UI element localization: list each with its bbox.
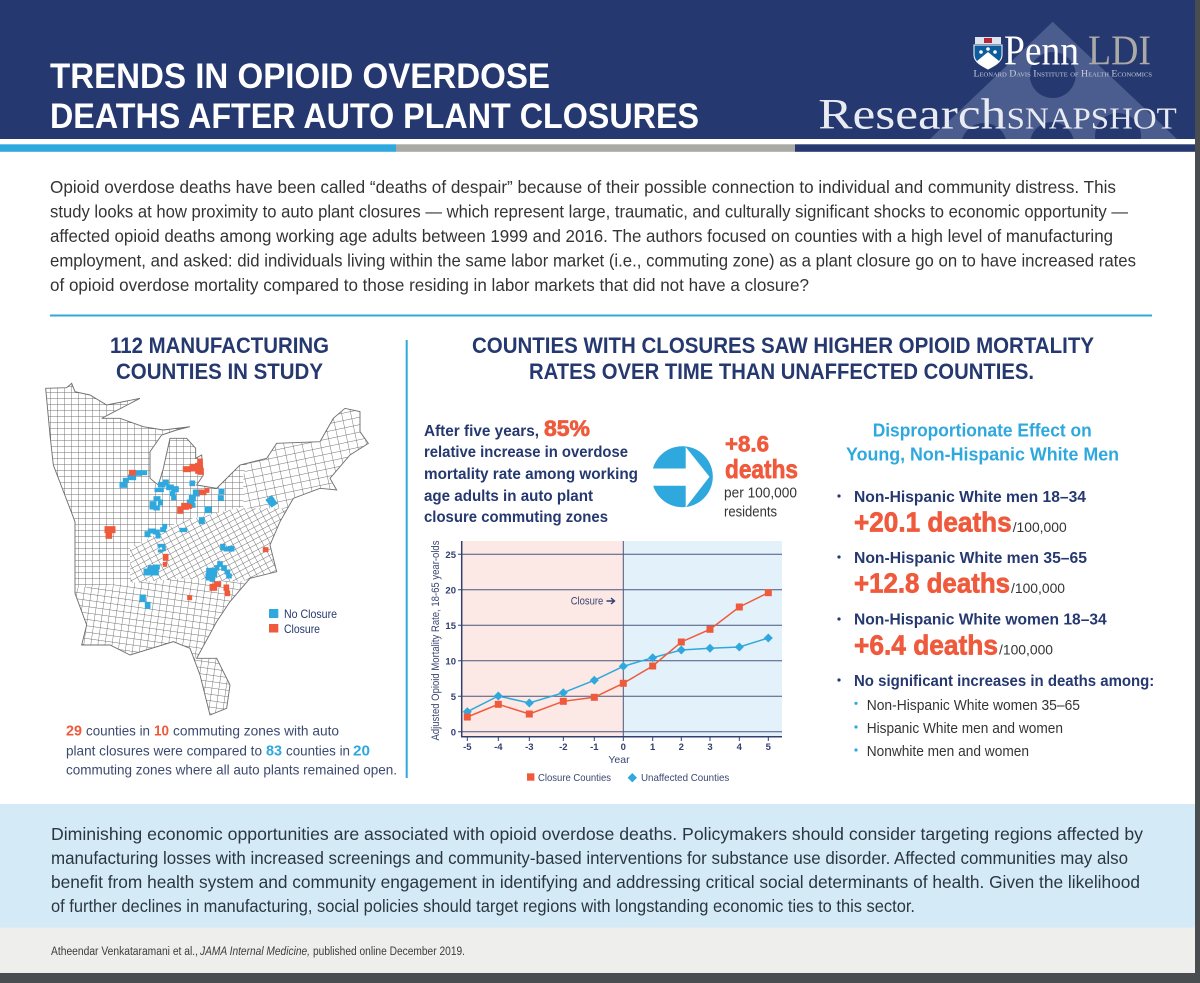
series: closure counties bbox=[464, 589, 772, 720]
title: TRENDS IN OPIOID OVERDOSE bbox=[50, 57, 550, 96]
stat: white men 35-65: Non-Hispanic White men 35–65 bbox=[854, 550, 1087, 567]
intro paragraph: study looks at how proximity to auto plant closures — which represent large, traumatic, and culturally significant shocks to economic opportunity — bbox=[50, 202, 1128, 222]
x axis labels: 5 bbox=[766, 742, 772, 753]
stat: plus 8.6 deaths: per 100,000 bbox=[724, 486, 797, 502]
no significant increases list: Hispanic White men and women bbox=[867, 721, 1063, 737]
stat: white men 18-34 bbox=[837, 489, 1086, 538]
x axis labels: -1 bbox=[590, 742, 599, 753]
line chart bbox=[430, 540, 782, 784]
map caption: counties in bbox=[86, 723, 150, 739]
y axis labels: 0 bbox=[451, 727, 456, 738]
panel: policy conclusion: of further declines in manufacturing, social policies should target regions with longstanding economic ties to this sector. bbox=[51, 896, 915, 916]
x axis labels: -4 bbox=[494, 742, 503, 753]
map legend: No Closure bbox=[284, 607, 337, 621]
x axis title: Year bbox=[608, 754, 630, 766]
heading: counties with closures: RATES OVER TIME THAN UNAFFECTED COUNTIES. bbox=[529, 359, 1034, 384]
heading: disproportionate effect bbox=[846, 420, 1119, 465]
Research Snapshot wordmark: SNAPSHOT bbox=[1007, 100, 1177, 135]
logo: Penn LDI bbox=[974, 28, 1152, 79]
panel: policy conclusion: manufacturing losses with increased screenings and community-based interventions for substance use disorder. Affected communities may also bbox=[51, 848, 1128, 868]
panel: policy conclusion bbox=[0, 804, 1195, 928]
x axis labels: 3 bbox=[707, 742, 713, 753]
watermark emblem bbox=[930, 22, 1177, 139]
logo: Penn LDI: Leonard Davis Institute of Health Economics bbox=[974, 69, 1152, 79]
map caption: 10 bbox=[154, 724, 169, 740]
heading: disproportionate effect: Young, Non-Hispanic White Men bbox=[846, 444, 1119, 465]
x axis labels: -5 bbox=[463, 742, 472, 753]
heading: counties with closures bbox=[472, 333, 1094, 384]
stat: white men 35-65: +12.8 deaths bbox=[854, 568, 1010, 599]
callout: 85 percent increase: mortality rate among working bbox=[424, 466, 638, 483]
icon: arrow in circle bbox=[650, 446, 713, 508]
stat: plus 8.6 deaths: deaths bbox=[725, 454, 798, 484]
logo: Penn LDI: Penn bbox=[1004, 28, 1079, 74]
x axis labels: 0 bbox=[621, 742, 626, 753]
no significant increases list: No significant increases in deaths among: bbox=[854, 673, 1154, 690]
map caption: 83 bbox=[266, 744, 282, 760]
intro paragraph bbox=[50, 177, 1136, 295]
intro paragraph: affected opioid deaths among working age adults between 1999 and 2016. The authors focused on counties with a high level of manufacturing bbox=[50, 226, 1113, 246]
x axis labels: 2 bbox=[679, 742, 684, 753]
y axis labels: 10 bbox=[445, 656, 456, 667]
map legend bbox=[269, 607, 337, 636]
map caption: counties in bbox=[286, 743, 350, 759]
map legend: Closure bbox=[284, 622, 320, 636]
stat: white men 18-34: +20.1 deaths bbox=[854, 507, 1012, 538]
stat: white women 18-34: +6.4 deaths bbox=[854, 629, 998, 660]
stat: plus 8.6 deaths bbox=[724, 432, 798, 521]
stat: white women 18-34: Non-Hispanic White women 18–34 bbox=[854, 612, 1107, 629]
heading: counties with closures: COUNTIES WITH CLOSURES SAW HIGHER OPIOID MORTALITY bbox=[472, 333, 1094, 358]
panel: policy conclusion: benefit from health system and community engagement in identifying and addressing critical social determinants of health. Given the likelihood bbox=[51, 872, 1140, 892]
stat: white men 18-34: Non-Hispanic White men 18–34 bbox=[854, 489, 1086, 506]
callout: 85 percent increase: age adults in auto plant bbox=[424, 488, 594, 505]
map caption: 20 bbox=[353, 744, 370, 760]
x axis labels: 1 bbox=[650, 742, 656, 753]
footer citation: published online December 2019. bbox=[313, 946, 465, 958]
stat: white women 18-34 bbox=[837, 612, 1107, 660]
map caption: commuting zones with auto bbox=[173, 723, 339, 739]
title bbox=[50, 57, 699, 136]
icon: Penn shield bbox=[974, 37, 1002, 69]
chart legend: Closure Counties bbox=[538, 772, 611, 784]
chart legend bbox=[527, 772, 729, 784]
header band bbox=[0, 0, 1195, 139]
heading: 112 manufacturing counties: 112 MANUFACTURING bbox=[110, 333, 329, 358]
map caption: commuting zones where all auto plants remained open. bbox=[66, 761, 397, 777]
intro paragraph: Opioid overdose deaths have been called “deaths of despair” because of their possible connection to individual and community distress. This bbox=[50, 177, 1116, 197]
stat list bbox=[837, 489, 1154, 760]
y axis labels: 5 bbox=[451, 692, 457, 703]
intro paragraph: employment, and asked: did individuals living within the same labor market (i.e., commuting zone) as a plant closure go on to have increased rates bbox=[50, 250, 1136, 270]
Research Snapshot wordmark: Research bbox=[818, 91, 1006, 138]
callout: 85 percent increase: closure commuting zones bbox=[424, 509, 608, 526]
stat: plus 8.6 deaths: +8.6 bbox=[725, 432, 769, 457]
map caption bbox=[66, 723, 397, 777]
no significant increases list bbox=[837, 673, 1154, 760]
y axis labels: 20 bbox=[445, 585, 456, 596]
x axis labels bbox=[463, 742, 772, 753]
x axis labels: -3 bbox=[525, 742, 534, 753]
callout: 85 percent increase: After five years, bbox=[424, 423, 539, 440]
map caption: plant closures were compared to bbox=[66, 743, 262, 759]
map: eastern US counties bbox=[45, 382, 369, 716]
tricolor strip bbox=[0, 144, 1195, 152]
heading: 112 manufacturing counties: COUNTIES IN STUDY bbox=[116, 359, 323, 384]
series: unaffected counties bbox=[463, 634, 773, 716]
no significant increases list: Non-Hispanic White women 35–65 bbox=[867, 698, 1080, 714]
closure marker label: Closure bbox=[571, 596, 603, 608]
x axis labels: 4 bbox=[737, 742, 743, 753]
y axis labels: 15 bbox=[445, 621, 457, 632]
heading: disproportionate effect: Disproportionate Effect on bbox=[873, 420, 1092, 441]
chart legend: Unaffected Counties bbox=[641, 772, 729, 784]
intro paragraph: of opioid overdose mortality compared to those residing in labor markets that did not have a closure? bbox=[50, 275, 809, 295]
callout: 85 percent increase: 85% bbox=[544, 416, 590, 441]
stat: white men 35-65: /100,000 bbox=[1011, 580, 1065, 596]
stat: white men 18-34: /100,000 bbox=[1013, 519, 1067, 535]
title: DEATHS AFTER AUTO PLANT CLOSURES bbox=[50, 97, 699, 136]
stat: white women 18-34: /100,000 bbox=[999, 642, 1053, 658]
counties: no closure bbox=[120, 471, 277, 608]
x axis labels: -2 bbox=[559, 742, 568, 753]
heading: 112 manufacturing counties bbox=[110, 333, 329, 384]
footer citation bbox=[0, 928, 1195, 973]
panel: policy conclusion: Diminishing economic opportunities are associated with opioid overdose deaths. Policymakers should consider targeting regions affected by bbox=[51, 824, 1143, 844]
footer citation: Atheendar Venkataramani et al., bbox=[51, 946, 198, 958]
map caption: 29 bbox=[66, 724, 82, 740]
logo: Penn LDI: LDI bbox=[1088, 28, 1151, 74]
stat: plus 8.6 deaths: residents bbox=[724, 505, 777, 521]
y axis title: Adjusted Opioid Mortality Rate, 18-65 year-olds bbox=[430, 540, 442, 740]
y axis labels bbox=[445, 550, 457, 738]
footer citation: JAMA Internal Medicine, bbox=[199, 946, 310, 958]
stat: white men 35-65 bbox=[837, 550, 1087, 599]
y axis labels: 25 bbox=[445, 550, 457, 561]
no significant increases list: Nonwhite men and women bbox=[867, 744, 1029, 760]
callout: 85 percent increase: relative increase in overdose bbox=[424, 444, 628, 461]
counties: closure bbox=[105, 459, 268, 600]
Research Snapshot wordmark bbox=[818, 91, 1177, 138]
callout: 85 percent increase bbox=[424, 416, 638, 526]
